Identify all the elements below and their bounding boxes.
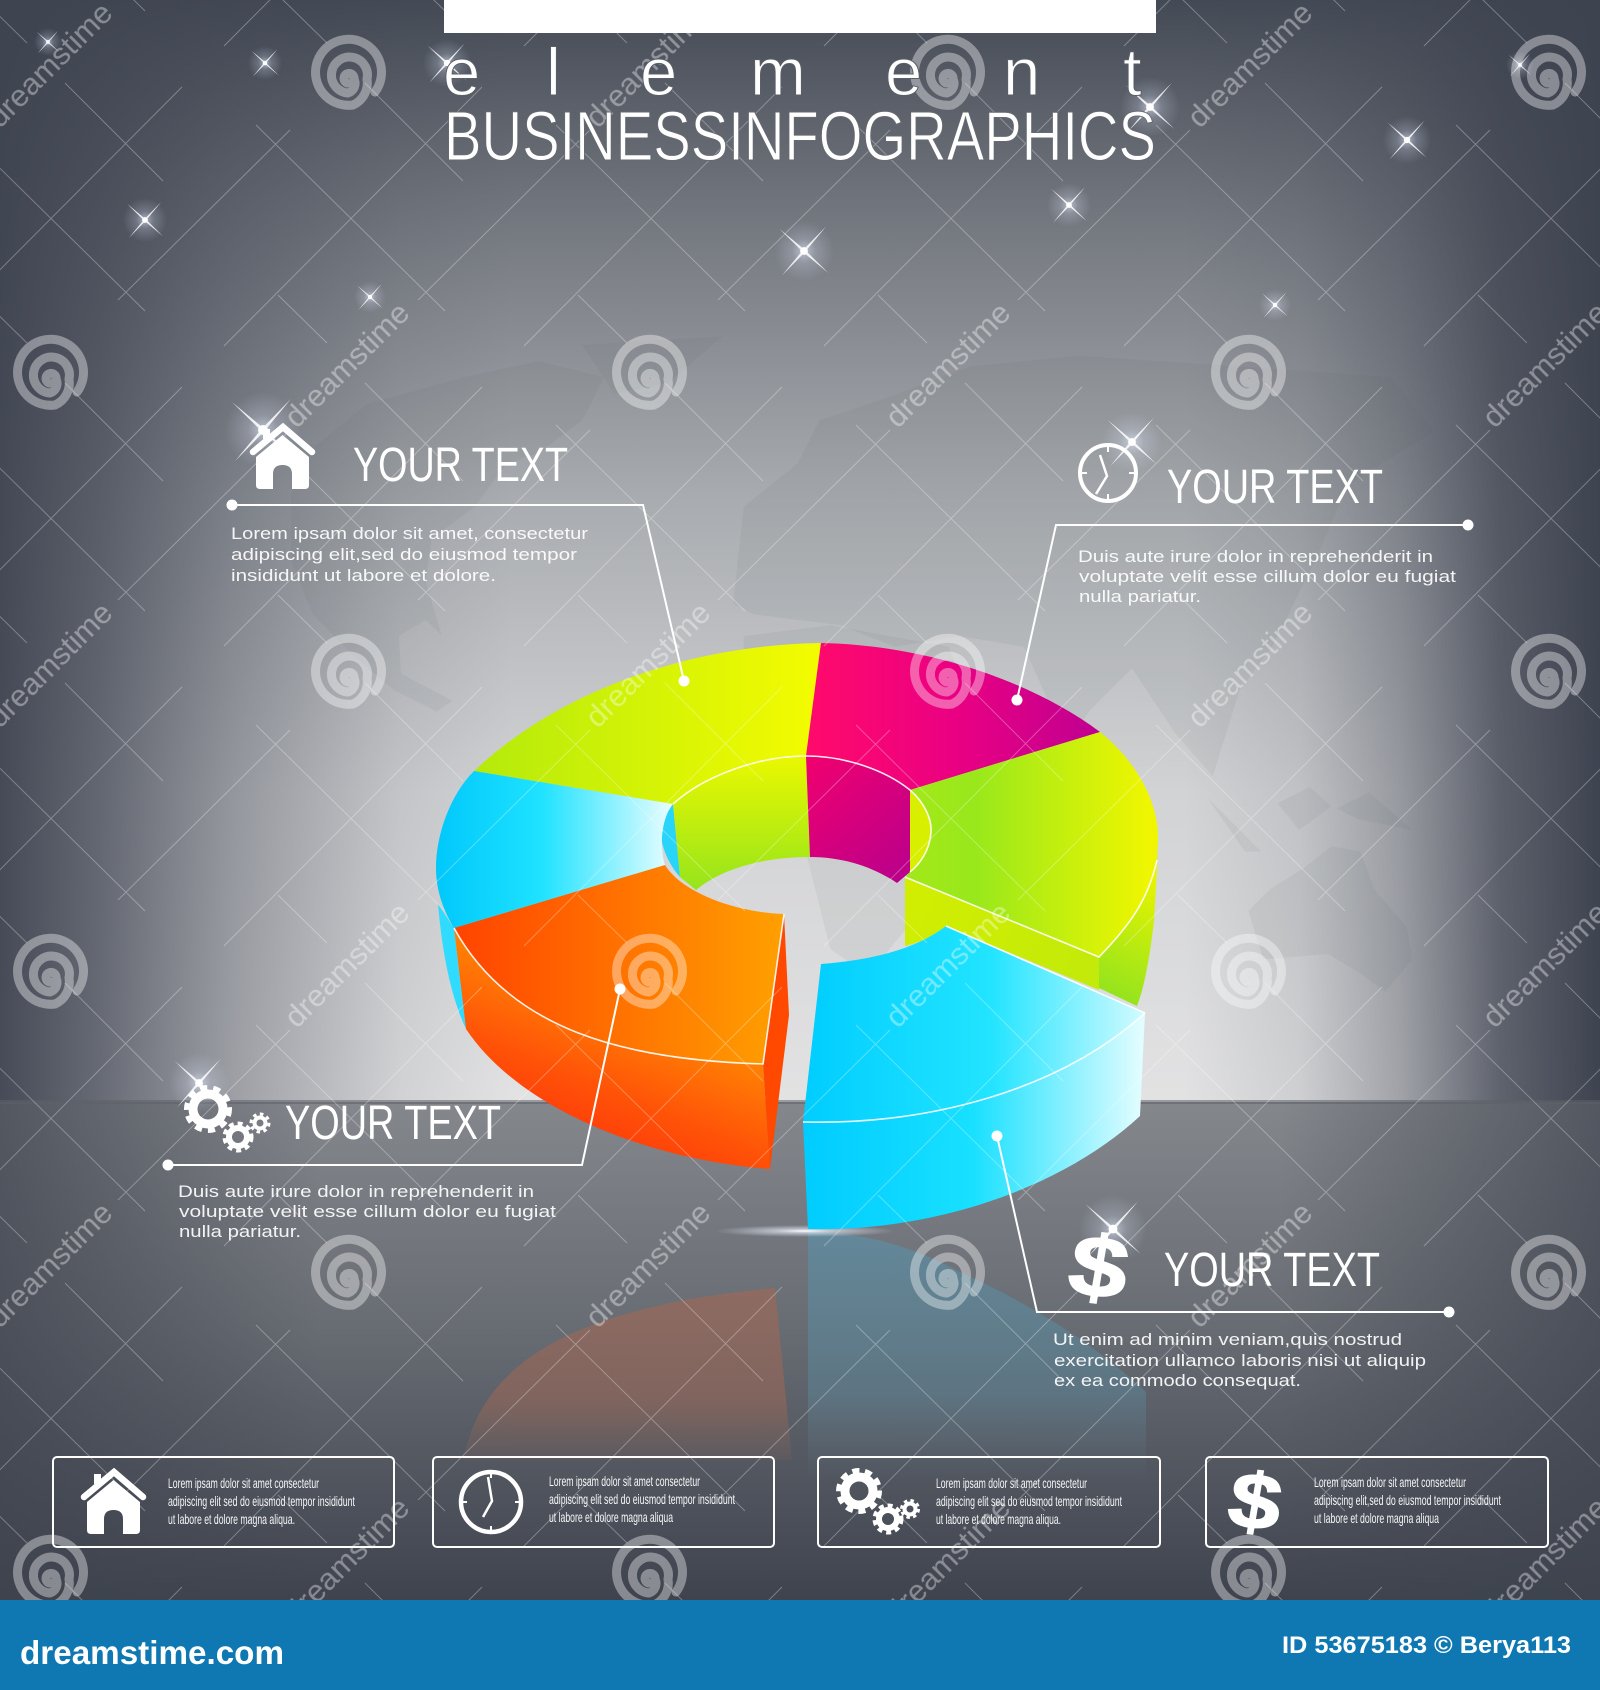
- segment: lime side: [1099, 850, 1158, 1006]
- watermark text: dreamstime: [878, 295, 1017, 434]
- panel text: adipiscing elit sed do eiusmod tempor insididunt: [549, 1491, 735, 1507]
- heading: your text: YOUR TEXT: [353, 439, 568, 492]
- world map: [291, 336, 1434, 992]
- icon: dollar: $: [1222, 1456, 1288, 1548]
- leader line: [226, 500, 690, 686]
- segment: cyan side sliver: [438, 904, 466, 1029]
- watermark text: dreamstime: [1180, 595, 1319, 734]
- watermark text: dreamstime: [277, 1490, 416, 1629]
- panel text: [168, 1475, 355, 1527]
- watermark text: dreamstime: [578, 1195, 717, 1334]
- body text: insididunt ut labore et dolore.: [231, 566, 496, 585]
- body text: exercitation ullamco laboris nisi ut aliquip: [1054, 1351, 1426, 1370]
- watermark text: dreamstime: [578, 595, 717, 734]
- panel: gears: [818, 1457, 1160, 1547]
- callout: home: [226, 427, 690, 686]
- heading: your text: YOUR TEXT: [285, 1097, 501, 1150]
- heading: your text: YOUR TEXT: [1164, 1244, 1380, 1297]
- body text: [231, 524, 588, 585]
- body text: nulla pariatur.: [179, 1222, 301, 1241]
- panel text: adipiscing elit sed do eiusmod tempor insididunt: [168, 1493, 355, 1509]
- panel text: [549, 1473, 735, 1525]
- background: floor: [0, 1100, 1600, 1600]
- icon: dollar: $: [1062, 1217, 1136, 1318]
- body text: Ut enim ad minim veniam,quis nostrud: [1053, 1330, 1402, 1349]
- body text: [1078, 547, 1456, 606]
- stars: [26, 20, 1542, 1282]
- icon: house: [253, 427, 312, 489]
- watermark text: dreamstime: [1180, 1195, 1319, 1334]
- body text: voluptate velit esse cillum dolor eu fugiat: [1079, 567, 1456, 586]
- footer logo text: dreamstime.com: [20, 1634, 284, 1671]
- body text: Lorem ipsam dolor sit amet, consectetur: [231, 524, 588, 543]
- segment: cyan left top: [436, 771, 673, 928]
- icon: gears: [187, 1088, 269, 1150]
- callout: gears: [162, 984, 626, 1241]
- panel text: ut labore et dolore magna aliqua: [549, 1509, 673, 1525]
- watermark text: dreamstime: [277, 895, 416, 1034]
- 3D donut chart: [436, 643, 1158, 1229]
- footer banner: [0, 1600, 1600, 1690]
- body text: ex ea commodo consequat.: [1054, 1371, 1301, 1390]
- panel text: [1314, 1474, 1501, 1526]
- segment: lime top: [474, 643, 821, 804]
- leader line: [1012, 520, 1474, 706]
- body text: [178, 1182, 556, 1241]
- panel text: [936, 1475, 1122, 1527]
- callout: clock: [1012, 445, 1474, 706]
- panel text: ut labore et dolore magna aliqua: [1314, 1510, 1439, 1526]
- icon: clock: [1080, 445, 1136, 501]
- panel text: Lorem ipsam dolor sit amet consectetur: [936, 1475, 1087, 1491]
- leader line: [992, 1130, 1454, 1318]
- panel text: ut labore et dolore magna aliqua.: [168, 1511, 295, 1527]
- body text: Duis aute irure dolor in reprehenderit in: [1078, 547, 1433, 566]
- segment: right lime top: [905, 732, 1158, 957]
- icon: house: [84, 1472, 143, 1534]
- segment: orange cut face: [763, 914, 789, 1169]
- title: element: element: [443, 35, 1142, 110]
- panel text: adipiscing elit sed do eiusmod tempor insididunt: [936, 1493, 1122, 1509]
- segment: orange side: [454, 928, 770, 1169]
- body text: Duis aute irure dolor in reprehenderit in: [178, 1182, 534, 1201]
- title: business infographics: BUSINESSINFOGRAPHICS: [444, 97, 1156, 175]
- watermark text: dreamstime: [878, 895, 1017, 1034]
- callout: dollar: [992, 1130, 1454, 1390]
- floor light flare: [715, 1225, 895, 1237]
- segment: cyan top: [803, 926, 1145, 1122]
- panel text: Lorem ipsam dolor sit amet consectetur: [549, 1473, 700, 1489]
- leader line: [162, 984, 626, 1170]
- body text: voluptate velit esse cillum dolor eu fugiat: [179, 1202, 556, 1221]
- segment: cyan side: [803, 1013, 1145, 1229]
- segment: lime underside: [905, 877, 1099, 990]
- segment: magenta top: [806, 643, 1100, 790]
- panel: dollar: [1206, 1456, 1548, 1548]
- edge highlights: [454, 756, 1157, 1122]
- watermark text: dreamstime: [277, 295, 416, 434]
- white top bar: [444, 0, 1156, 33]
- panel text: ut labore et dolore magna aliqua.: [936, 1511, 1061, 1527]
- panel: clock: [433, 1457, 774, 1547]
- background: wall: [0, 0, 1600, 1102]
- panel text: Lorem ipsam dolor sit amet consectetur: [1314, 1474, 1466, 1490]
- watermark text: dreamstime: [878, 1490, 1017, 1629]
- segment: orange top: [454, 865, 784, 1064]
- body text: adipiscing elit,sed do eiusmod tempor: [231, 545, 577, 564]
- heading: your text: YOUR TEXT: [1167, 461, 1383, 514]
- icon: clock: [461, 1472, 521, 1532]
- reflection of donut: [463, 1232, 1146, 1480]
- segment: inner wall: [661, 756, 931, 890]
- panel text: Lorem ipsam dolor sit amet consectetur: [168, 1475, 319, 1491]
- panel: home: [53, 1457, 394, 1547]
- body text: nulla pariatur.: [1079, 587, 1201, 606]
- footer id text: ID 53675183 © Berya113: [1282, 1632, 1571, 1659]
- body text: [1053, 1330, 1426, 1390]
- icon: gears: [839, 1471, 918, 1532]
